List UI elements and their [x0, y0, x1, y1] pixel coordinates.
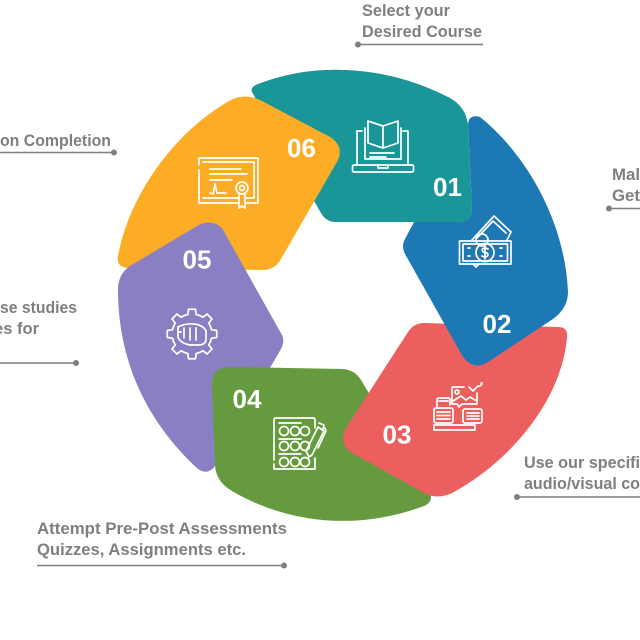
label: make payment (cropped at edge): Mal: [612, 166, 640, 184]
label: specific audio visual content (cropped at edge): audio/visual co: [524, 475, 640, 493]
icon: banknotes with dollar sign: [460, 216, 511, 267]
label: select your desired course: Desired Course: [362, 23, 482, 41]
panel: step 01 select course: [252, 70, 472, 222]
label: attempt assessments: Quizzes, Assignments etc.: [37, 541, 246, 559]
label: on completion (cropped at edge): on Completion: [0, 132, 111, 150]
label: case studies (cropped at edge): [0, 299, 79, 366]
icon: gear with fist: [167, 309, 217, 359]
icon: laptop with open book: [352, 121, 414, 172]
number 05: 05: [182, 244, 211, 274]
number 03: 03: [382, 420, 411, 450]
panel: step 03 audio visual content: [343, 323, 567, 496]
label: make payment (cropped at edge): [606, 166, 640, 212]
panel: step 05 case studies: [118, 222, 283, 472]
panel: step 04 assessments: [212, 367, 431, 521]
label: attempt assessments: Attempt Pre-Post Assessments: [37, 520, 287, 538]
label: make payment (cropped at edge): Get: [612, 187, 640, 205]
label: case studies (cropped at edge): se studies: [0, 299, 77, 317]
label: select your desired course: Select your: [362, 2, 451, 20]
label: attempt assessments: [37, 520, 287, 568]
panel: step 06 certificate: [118, 96, 340, 270]
number 04: 04: [232, 384, 262, 414]
icon: media and chat devices: [434, 383, 482, 430]
label: select your desired course: [355, 2, 483, 48]
number 02: 02: [482, 309, 511, 339]
label: specific audio visual content (cropped at edge): [514, 454, 640, 500]
number 06: 06: [287, 133, 316, 163]
label: specific audio visual content (cropped at edge): Use our specifi: [524, 454, 640, 472]
icon: certificate with seal: [199, 158, 258, 208]
panel: step 02 make payment: [403, 116, 568, 366]
icon: quiz sheet with pen: [274, 418, 326, 469]
number 01: 01: [433, 172, 462, 202]
